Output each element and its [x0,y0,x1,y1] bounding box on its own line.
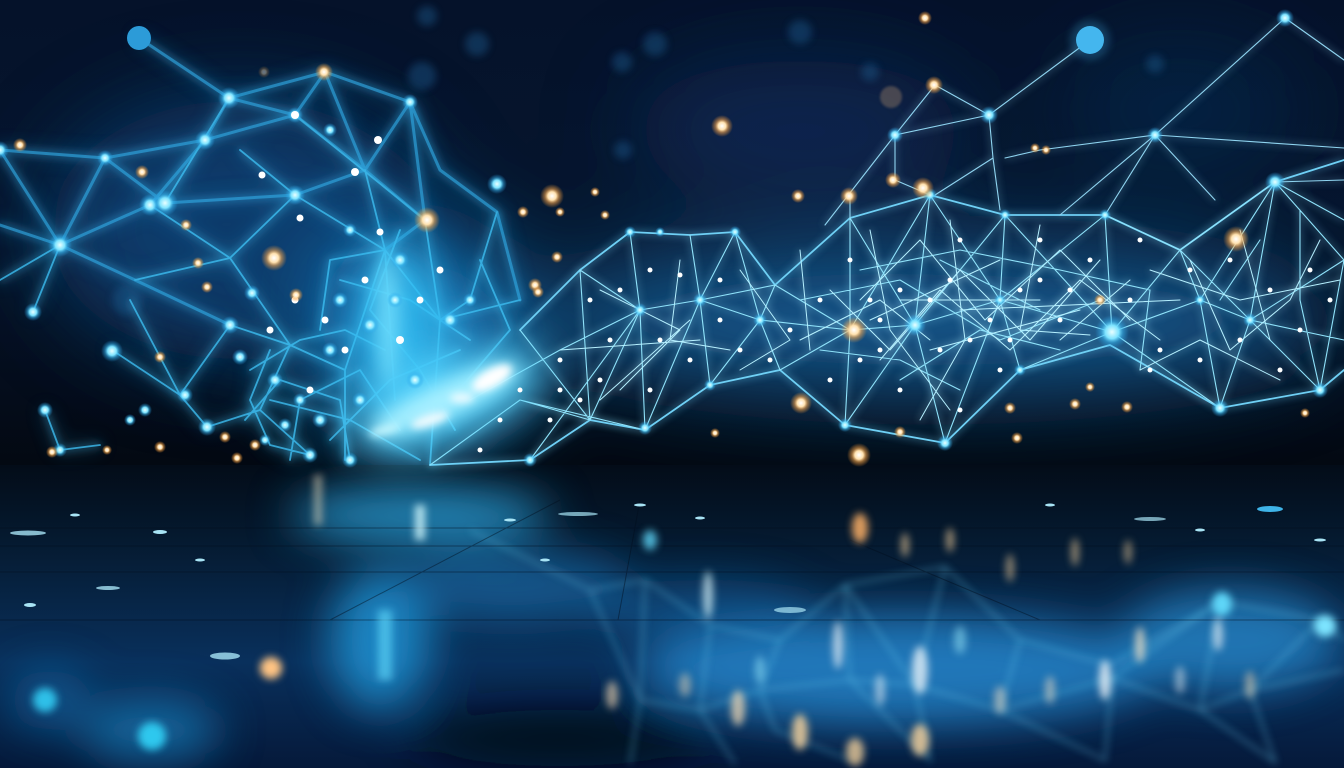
white data points in mesh [258,111,1332,452]
left network mesh: lines [0,38,520,465]
left network mesh: glow [0,38,520,465]
floor: grid seams [0,500,1344,620]
floor: reflective surface [0,465,1344,768]
floor: light reflections [10,487,1340,766]
muted bokeh disc [880,86,902,108]
glowing core: cloud of light [344,245,556,471]
right network mesh: glow [430,18,1344,465]
left network mesh: wide glow [0,38,520,465]
background: faint bokeh circles [112,6,1164,315]
cyan nodes [0,9,1328,468]
orange bokeh particles [13,11,1310,467]
background glow: soft blue haze [50,40,1330,450]
background: dark navy sky [0,0,1344,480]
floor: bright reflection streaks [33,475,1336,766]
floor: small light flecks [10,504,1326,660]
floor: blurred mesh reflection [470,530,1344,764]
large blue nodes [127,20,1110,60]
right network mesh: lines [430,18,1344,465]
